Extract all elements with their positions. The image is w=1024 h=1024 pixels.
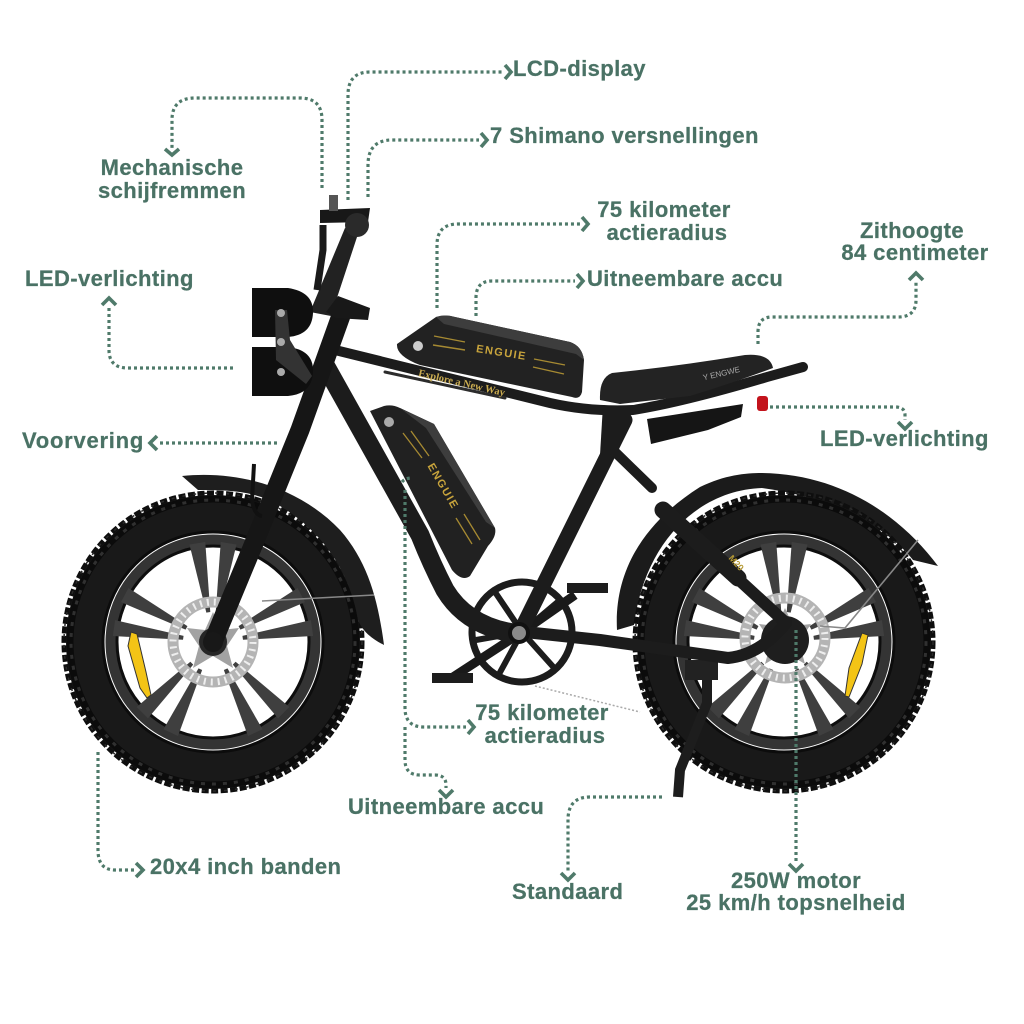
callout: Standaard bbox=[512, 797, 662, 904]
callout: 20x4 inch banden bbox=[98, 752, 341, 879]
handlebar bbox=[310, 195, 370, 316]
callout: LED-verlichting rear bbox=[770, 407, 989, 451]
callout: LED-verlichting front bbox=[25, 266, 233, 368]
rear frame bracket bbox=[647, 404, 743, 444]
callout: Voorvering bbox=[22, 428, 277, 453]
callout: Mechanische schijfremmen: Mechanische bbox=[101, 155, 243, 180]
callout: Voorvering: Voorvering bbox=[22, 428, 144, 453]
rear brake disc bbox=[745, 598, 825, 678]
callout: LED-verlichting front: LED-verlichting bbox=[25, 266, 194, 291]
rear axle model label: M20 bbox=[727, 553, 746, 573]
seat bbox=[600, 355, 773, 404]
bike illustration bbox=[64, 195, 938, 797]
callout: LCD-display: LCD-display bbox=[513, 56, 646, 81]
kickstand bbox=[678, 660, 718, 797]
callout: LCD-display bbox=[348, 56, 646, 200]
bottom bracket bbox=[510, 624, 528, 642]
callout: Zithoogte: Zithoogte bbox=[860, 218, 964, 243]
front brake disc bbox=[173, 602, 253, 682]
callout: 75 kilometer actieradius top: 75 kilometer bbox=[597, 197, 731, 222]
brake lever on fender bbox=[252, 464, 262, 516]
top tube slogan: Explore a New Way bbox=[417, 368, 507, 399]
callout: Mechanische schijfremmen: schijfremmen bbox=[98, 178, 246, 203]
rear fender bbox=[617, 473, 938, 630]
down tube battery bbox=[370, 405, 495, 578]
callout: 75 kilometer actieradius top bbox=[437, 197, 731, 308]
seat: Y ENGWE bbox=[702, 365, 741, 382]
front wheel bbox=[64, 493, 362, 791]
rear light bbox=[757, 396, 768, 411]
callout: Uitneembare accu top bbox=[476, 266, 783, 316]
callout: 20x4 inch banden: 20x4 inch banden bbox=[150, 854, 341, 879]
rear hub motor bbox=[761, 616, 809, 664]
callout: Mechanische schijfremmen bbox=[98, 98, 322, 203]
callout: 7 Shimano versnellingen bbox=[368, 123, 759, 197]
fender stays bbox=[262, 540, 918, 628]
top battery: ENGUIE bbox=[475, 343, 528, 363]
main frame bbox=[325, 350, 803, 658]
callout: 75 kilometer actieradius bottom bbox=[402, 478, 609, 748]
callout: Uitneembare accu top: Uitneembare accu bbox=[587, 266, 783, 291]
down tube battery: ENGUIE bbox=[425, 461, 461, 512]
callout: 75 kilometer actieradius bottom: actieradius bbox=[485, 723, 605, 748]
callout: 75 kilometer actieradius top: actieradius bbox=[607, 220, 727, 245]
fork bbox=[213, 310, 343, 642]
chain bbox=[535, 686, 640, 712]
stem display bbox=[326, 296, 370, 320]
callout: 250W motor bbox=[686, 630, 906, 915]
chainring and pedals bbox=[432, 582, 608, 683]
callout: Zithoogte bbox=[758, 218, 989, 344]
rear wheel bbox=[635, 493, 933, 791]
top battery bbox=[397, 316, 584, 398]
callout: 250W motor: 25 km/h topsnelheid bbox=[686, 890, 906, 915]
seat post strut bbox=[600, 405, 632, 455]
callout: 250W motor: 250W motor bbox=[731, 868, 861, 893]
callout: LED-verlichting rear: LED-verlichting bbox=[820, 426, 989, 451]
callout: Zithoogte: 84 centimeter bbox=[841, 240, 989, 265]
front reflector bbox=[128, 632, 151, 698]
callout: Uitneembare accu bottom: Uitneembare accu bbox=[348, 794, 544, 819]
callout: 7 Shimano versnellingen: 7 Shimano versnellingen bbox=[490, 123, 759, 148]
rear reflector bbox=[845, 633, 868, 697]
callout: Uitneembare accu bottom bbox=[348, 727, 544, 819]
callout: Standaard: Standaard bbox=[512, 879, 623, 904]
headlights bbox=[252, 288, 313, 396]
callout: 75 kilometer actieradius bottom: 75 kilometer bbox=[475, 700, 609, 725]
front fender bbox=[182, 475, 384, 645]
